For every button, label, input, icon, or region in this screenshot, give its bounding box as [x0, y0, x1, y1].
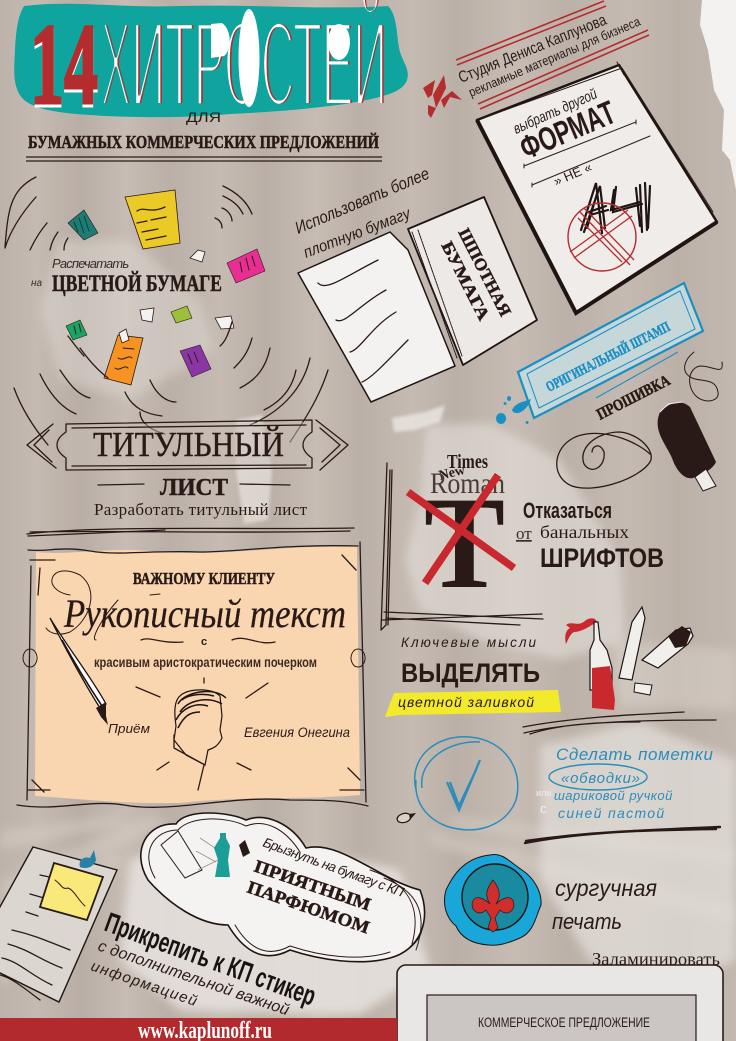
pen stub — [396, 812, 416, 824]
studio name: Студия Дениса Каплунова — [456, 12, 609, 87]
script heading: Рукописный текст — [63, 591, 346, 636]
sticker scribble — [55, 880, 85, 906]
ballpoint text: шариковой ручкой — [554, 788, 673, 803]
stitching label: ПРОШИВКА — [594, 372, 673, 424]
title white letter E bowl — [328, 24, 350, 60]
teal sheet — [68, 210, 98, 240]
yellow sheet — [125, 190, 180, 249]
sheet lines — [0, 875, 70, 1000]
inner sheet — [427, 995, 696, 1041]
footer bar — [0, 1018, 397, 1041]
right page inner edge — [412, 230, 462, 358]
laminate label: Заламинировать — [592, 949, 720, 969]
panel: handwritten letter — [17, 542, 368, 807]
yellow strip — [385, 690, 561, 717]
lower rule — [525, 827, 720, 843]
document title: КОММЕРЧЕСКОЕ ПРЕДЛОЖЕНИЕ — [478, 1015, 650, 1030]
title white letter O — [238, 9, 260, 107]
left page scribbles — [318, 260, 408, 382]
print handwriting: Распечатать — [52, 256, 130, 271]
peach sheet — [35, 546, 360, 803]
panel: banal fonts — [381, 451, 664, 630]
studio credit — [423, 1, 649, 118]
panel: highlight — [385, 607, 693, 717]
script swirl — [46, 571, 160, 640]
perfume bottle — [214, 833, 230, 877]
small diamond — [239, 840, 250, 857]
portrait of Onegin — [136, 678, 268, 790]
wax label one: сургучная — [555, 875, 657, 901]
corner frame — [381, 463, 543, 630]
title number 14: 14 — [30, 1, 98, 129]
on label: на — [31, 278, 43, 289]
panel: perfume cloud — [141, 813, 425, 962]
word New: New — [437, 463, 467, 484]
small flourishes — [141, 638, 275, 643]
format rule top — [524, 120, 636, 168]
perfume word: ПАРФЮМОМ — [245, 877, 372, 937]
check mark — [447, 760, 480, 810]
blue paste text: синей пастой — [558, 805, 665, 821]
thread spool — [658, 402, 716, 491]
yellow sticker — [40, 863, 103, 920]
panel: sticker — [0, 847, 320, 1020]
left page — [298, 232, 455, 402]
rule — [27, 528, 354, 536]
refuse word: Отказаться — [523, 498, 612, 523]
fill text: цветной заливкой — [398, 694, 535, 710]
small word: с — [201, 636, 207, 648]
ink drops — [496, 396, 531, 424]
not label: » НЕ « — [551, 159, 594, 189]
panel: ballpoint marks — [396, 712, 720, 843]
spray instruction: Брызнуть на бумагу с КП — [261, 835, 407, 900]
highlight word: ВЫДЕЛЯТЬ — [401, 658, 540, 688]
fountain pen — [50, 618, 108, 725]
letter tagline: красивым аристократическим почерком — [94, 655, 317, 670]
note sheet — [0, 847, 117, 1002]
paper back shadow — [477, 120, 717, 313]
fleur-de-lis — [472, 880, 514, 932]
big letter T: T — [424, 469, 505, 616]
markers — [565, 607, 693, 710]
title block — [14, 0, 408, 161]
handwriting line one: Использовать более — [292, 164, 432, 238]
format rule bottom — [532, 136, 650, 187]
seal wax — [444, 854, 541, 945]
from word: от — [516, 524, 532, 543]
with label: с — [540, 801, 547, 816]
title teal blob — [14, 4, 408, 117]
right page — [408, 197, 537, 365]
paper sketch edge — [483, 62, 713, 212]
key thoughts text: Ключевые мысли — [401, 635, 537, 650]
panel: wax seal — [444, 854, 657, 945]
make notes text: Сделать пометки — [556, 745, 714, 764]
lime sheet — [171, 306, 192, 323]
subtitle: БУМАЖНЫХ КОММЕРЧЕСКИХ ПРЕДЛОЖЕНИЙ — [28, 132, 379, 152]
burst lines lower — [14, 322, 328, 445]
title page heading: ТИТУЛЬНЫЙ — [93, 425, 284, 464]
thread scribble — [685, 352, 722, 401]
panel: stamp — [496, 283, 703, 424]
strokes text: «обводки» — [561, 770, 640, 787]
panel: format paper — [477, 62, 717, 313]
thread spiral — [557, 432, 651, 488]
spray lines — [196, 838, 222, 870]
coloured paper heading: ЦВЕТНОЙ БУМАГЕ — [52, 271, 222, 296]
fonts word: ШРИФТОВ — [540, 543, 664, 573]
paper sheet — [477, 65, 717, 313]
upper rule — [523, 712, 716, 734]
panel: lamination — [397, 949, 723, 1041]
Onegin name: Евгения Онегина — [244, 724, 350, 740]
red bar — [0, 1018, 397, 1041]
stamp inner — [527, 291, 695, 408]
panel: thick paper book — [292, 164, 537, 402]
stamp text: ОРИГИНАЛЬНЫЙ ШТАМП — [543, 318, 673, 396]
blue pin — [80, 850, 96, 868]
pleasant word: ПРИЯТНЫМ — [252, 856, 374, 915]
pink sheet — [227, 249, 265, 283]
panel: stitching — [557, 352, 722, 491]
handwriting line two: плотную бумагу — [301, 205, 414, 262]
logo arrows — [423, 75, 462, 118]
thick paper heading second line: БУМАГА — [437, 238, 494, 324]
ribbon outline — [27, 420, 348, 470]
orange sheet — [104, 335, 143, 385]
sheet flourishes — [98, 484, 290, 485]
title white letter P bowl — [211, 23, 230, 58]
wax label two: печать — [552, 909, 622, 934]
cloud stack shadows — [352, 890, 422, 959]
word Roman: Roman — [430, 467, 505, 500]
frame lines — [17, 542, 368, 807]
cloud inner line — [149, 819, 421, 957]
format heading: ФОРМАТ — [514, 93, 621, 166]
banal word: банальных — [540, 522, 629, 542]
red cross — [408, 475, 514, 583]
title number shadow: 14 — [30, 4, 98, 132]
studio tagline: рекламные материалы для бизнеса — [466, 13, 643, 100]
stamp ornament — [596, 352, 678, 398]
white flakes — [119, 250, 234, 343]
studio lower stripes — [478, 30, 649, 109]
subtitle rule — [26, 157, 382, 161]
title page note: Разработать титульный лист — [94, 500, 308, 519]
green sheet — [66, 320, 87, 340]
seal inner — [462, 864, 528, 930]
thick paper heading: ШПОТНАЯ — [454, 225, 515, 319]
studio upper stripes — [456, 1, 606, 65]
frame ornaments — [23, 649, 365, 667]
perfumed paper — [161, 831, 202, 878]
strokes ellipse — [549, 764, 647, 790]
stamp outer — [518, 283, 703, 418]
format handwriting: выбрать другой — [511, 85, 600, 138]
sheet word: ЛИСТ — [160, 475, 228, 501]
ribbon — [60, 422, 312, 470]
sticker note line one: с дополнительной важной — [96, 938, 292, 1020]
panel: coloured paper — [5, 177, 328, 445]
crossed A4 — [568, 183, 650, 271]
title for: ДЛЯ — [186, 109, 221, 125]
or label: или — [536, 788, 551, 798]
sticker note line two: информацией — [89, 958, 200, 1010]
word Times: Times — [447, 451, 488, 473]
reception word: Приём — [108, 721, 150, 736]
cloud body — [141, 813, 425, 962]
blue circle — [415, 737, 518, 830]
purple sheet — [180, 345, 211, 377]
panel: title page banner — [27, 420, 354, 536]
laminate sheet — [397, 965, 723, 1041]
burst lines upper — [5, 177, 252, 250]
important client heading: ВАЖНОМУ КЛИЕНТУ — [133, 569, 275, 588]
